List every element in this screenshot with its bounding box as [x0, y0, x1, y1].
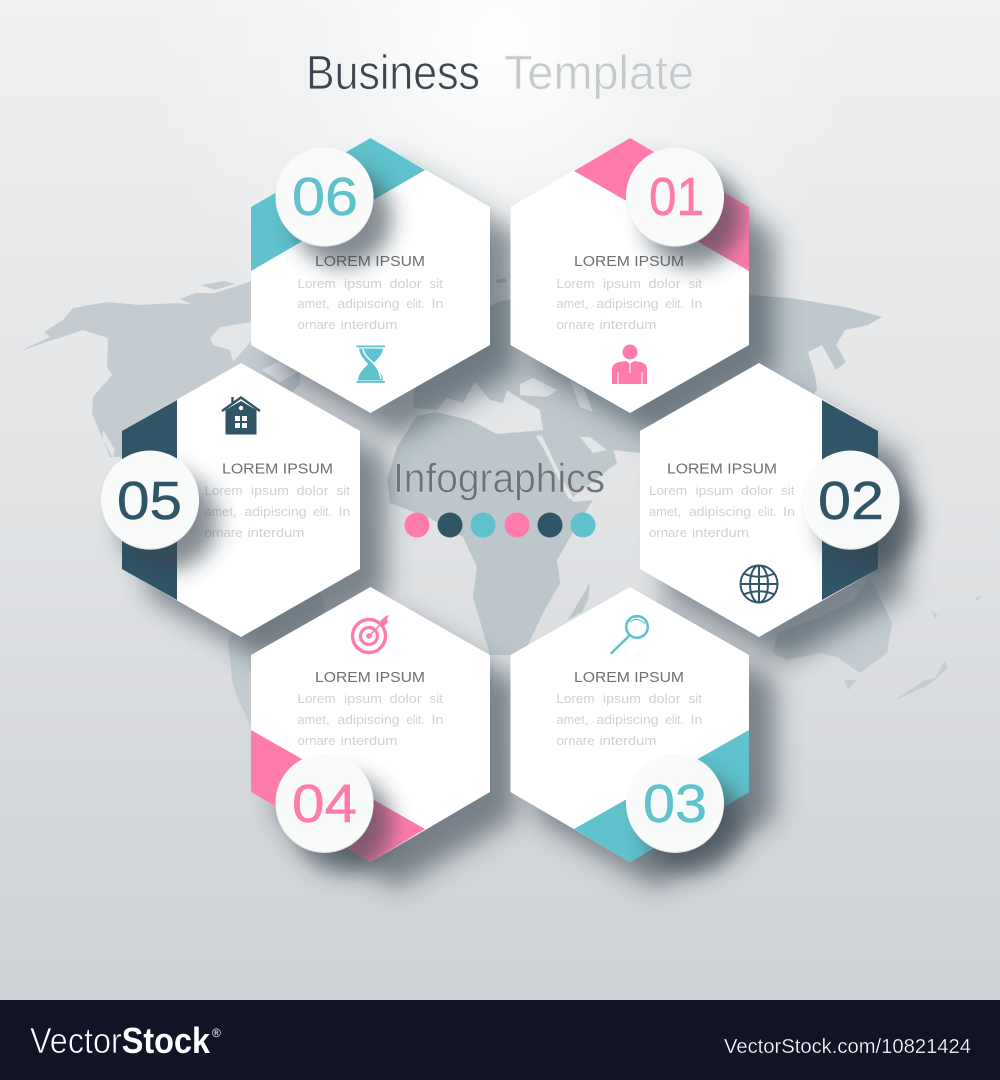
- icon: businessman: [612, 344, 647, 384]
- map: South America: [228, 590, 325, 724]
- hexagon shadows: [148, 164, 904, 888]
- body text: amet,: [556, 296, 588, 311]
- central label: Infographics: [393, 455, 605, 538]
- accent band: teal: [251, 138, 425, 271]
- body text: sit: [688, 691, 702, 706]
- body text: Lorem: [649, 483, 687, 498]
- body text: interdum: [692, 525, 749, 540]
- icon: hourglass: [356, 346, 385, 383]
- number badge: 05: [101, 450, 218, 570]
- body text: ipsum: [251, 483, 289, 498]
- number badge: 06: 06: [292, 167, 358, 227]
- panel: 02: [640, 363, 918, 637]
- body text: dolor: [648, 276, 681, 291]
- map: Arctic islands: [180, 280, 255, 312]
- accent band: pink: [251, 730, 425, 862]
- footer image id: VectorStock.com/10821424: [724, 1035, 971, 1058]
- body text: adipiscing: [244, 504, 306, 519]
- map: seas: [435, 378, 607, 500]
- map: Hudson Bay: [103, 322, 298, 458]
- body text: [204, 483, 350, 540]
- body text: amet,: [298, 296, 330, 311]
- body text: Lorem: [298, 691, 336, 706]
- body text: ornare: [556, 733, 594, 748]
- body text: adipiscing: [596, 712, 658, 727]
- accent band: dark: [822, 400, 878, 600]
- body text: ipsum: [344, 691, 382, 706]
- body text: dolor: [648, 691, 681, 706]
- icon: target: [352, 615, 389, 652]
- accent band: dark: [122, 400, 177, 600]
- icon: house: [222, 397, 260, 434]
- body text: [649, 483, 795, 540]
- heading: LOREM IPSUM: [315, 669, 425, 686]
- body text: dolor: [296, 483, 329, 498]
- body text: Lorem: [204, 483, 242, 498]
- body text: [556, 276, 702, 332]
- body text: elit.: [666, 296, 684, 311]
- map: Africa: [387, 412, 593, 655]
- map: Eurasia: [413, 290, 882, 540]
- map: Tasmania and New Zealand: [844, 596, 982, 700]
- panel: 03: [510, 587, 749, 873]
- body text: ornare: [649, 525, 687, 540]
- number badge: 01: 01: [649, 167, 704, 227]
- title: Business: [306, 47, 480, 100]
- body text: In: [432, 296, 444, 311]
- heading: LOREM IPSUM: [222, 460, 333, 478]
- body text: amet,: [556, 712, 588, 727]
- body text: sit: [688, 276, 702, 291]
- heading: Infographics: Infographics: [393, 455, 605, 501]
- body text: interdum: [248, 525, 304, 540]
- number badge: 04: [276, 754, 392, 873]
- body text: sit: [430, 691, 443, 706]
- heading: LOREM IPSUM: [315, 253, 425, 270]
- body text: amet,: [204, 504, 236, 519]
- accent band: pink: [574, 138, 749, 271]
- body text: [298, 276, 444, 332]
- body text: ipsum: [603, 276, 641, 291]
- body text: In: [338, 504, 350, 519]
- body text: amet,: [649, 504, 681, 519]
- number badge: 03: 03: [643, 774, 707, 834]
- number badge: 02: 02: [818, 471, 884, 531]
- body text: ipsum: [696, 483, 734, 498]
- heading: LOREM IPSUM: [574, 253, 684, 270]
- body text: sit: [430, 276, 443, 291]
- body text: [556, 691, 702, 748]
- number badge: 02: [802, 450, 918, 570]
- body text: sit: [336, 483, 350, 498]
- panel: 05: [101, 363, 360, 637]
- title: [306, 47, 694, 100]
- body text: ornare: [298, 733, 336, 748]
- number badge: 03: [626, 754, 742, 873]
- body text: ornare: [298, 317, 336, 332]
- row of coloured dots: [404, 512, 596, 538]
- map: Australia: [773, 577, 892, 673]
- panel: 01: [510, 138, 749, 413]
- body text: dolor: [741, 483, 774, 498]
- body text: In: [432, 712, 444, 727]
- body text: adipiscing: [338, 296, 400, 311]
- body text: sit: [781, 483, 795, 498]
- footer bar: [0, 1000, 1000, 1080]
- footer logo: VectorStock: VectorStock: [30, 1020, 211, 1061]
- body text: dolor: [390, 691, 422, 706]
- body text: elit.: [666, 712, 684, 727]
- number badge: 06: [276, 148, 392, 267]
- world map: [20, 278, 982, 724]
- body text: interdum: [340, 733, 398, 748]
- body text: elit.: [406, 296, 424, 311]
- map: Madagascar: [568, 583, 590, 620]
- map: Japan and islands: [495, 278, 850, 596]
- body text: amet,: [298, 712, 330, 727]
- body text: ornare: [204, 525, 242, 540]
- body text: Lorem: [556, 691, 594, 706]
- number badge: 01: [626, 148, 742, 267]
- body text: adipiscing: [689, 504, 751, 519]
- body text: interdum: [600, 733, 656, 748]
- panel: 06: [251, 138, 490, 413]
- body text: In: [783, 504, 795, 519]
- body text: [298, 691, 444, 748]
- number badge: 04: 04: [292, 774, 357, 834]
- body text: Lorem: [298, 276, 336, 291]
- body text: elit.: [314, 504, 332, 519]
- body text: ipsum: [344, 276, 382, 291]
- body text: In: [690, 296, 702, 311]
- registered mark: ®: [212, 1026, 221, 1040]
- body text: ornare: [556, 317, 594, 332]
- body text: ipsum: [603, 691, 641, 706]
- body text: Lorem: [556, 276, 594, 291]
- panel: 04: [251, 587, 490, 873]
- body text: interdum: [340, 317, 398, 332]
- map: North America: [20, 300, 300, 480]
- body text: interdum: [600, 317, 656, 332]
- title: Template: [504, 47, 694, 100]
- heading: LOREM IPSUM: [667, 460, 777, 478]
- icon: magnifier: [612, 616, 648, 653]
- accent band: teal: [574, 730, 749, 862]
- body text: adipiscing: [596, 296, 658, 311]
- icon: globe: [740, 566, 778, 602]
- body text: adipiscing: [338, 712, 400, 727]
- number badge: 05: 05: [117, 471, 182, 531]
- body text: elit.: [758, 504, 776, 519]
- body text: In: [690, 712, 702, 727]
- body text: dolor: [390, 276, 422, 291]
- heading: LOREM IPSUM: [574, 669, 684, 686]
- body text: elit.: [406, 712, 424, 727]
